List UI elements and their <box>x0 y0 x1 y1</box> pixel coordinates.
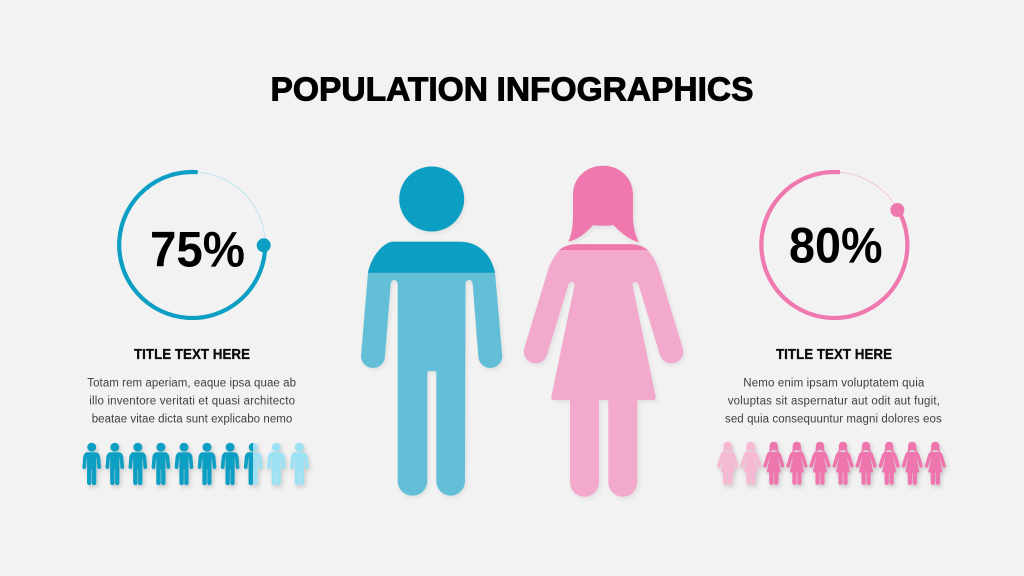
text block: female <box>725 378 942 426</box>
text block: male: beatae vitae dicta sunt explicabo nemo <box>92 414 292 426</box>
heading: female: TITLE TEXT HERE <box>776 346 892 363</box>
male head <box>399 166 464 232</box>
title <box>270 71 754 108</box>
progress ring: 75% <box>119 172 271 318</box>
title: INFOGRAPHICS <box>496 71 754 108</box>
text block: female: voluptas sit aspernatur aut odit aut fugit, <box>728 396 940 408</box>
percentage: 75%: 75% <box>150 222 245 278</box>
progress ring: 80% <box>761 172 907 318</box>
heading: male: TITLE TEXT HERE <box>134 346 250 363</box>
title: POPULATION <box>270 71 488 108</box>
female hair <box>568 166 639 242</box>
female shoulder fill <box>560 244 648 250</box>
text block: male: Totam rem aperiam, eaque ipsa quae ab <box>87 378 296 390</box>
text block: male <box>87 378 296 426</box>
figure: female <box>524 166 683 497</box>
text block: male: illo inventore veritati et quasi architecto <box>89 396 295 408</box>
text block: female: Nemo enim ipsam voluptatem quia <box>743 378 925 390</box>
panel: male statistics <box>83 172 308 485</box>
female body <box>524 244 683 497</box>
text block: female: sed quia consequuntur magni dolores eos <box>725 414 942 426</box>
pictogram row: male 75% <box>83 443 308 485</box>
percentage: 80%: 80% <box>789 218 882 274</box>
male shoulder fill <box>368 242 495 273</box>
pictogram row: female 80% <box>717 442 946 485</box>
male body <box>361 242 502 496</box>
panel: female statistics <box>717 172 946 485</box>
figure: male <box>361 166 502 496</box>
